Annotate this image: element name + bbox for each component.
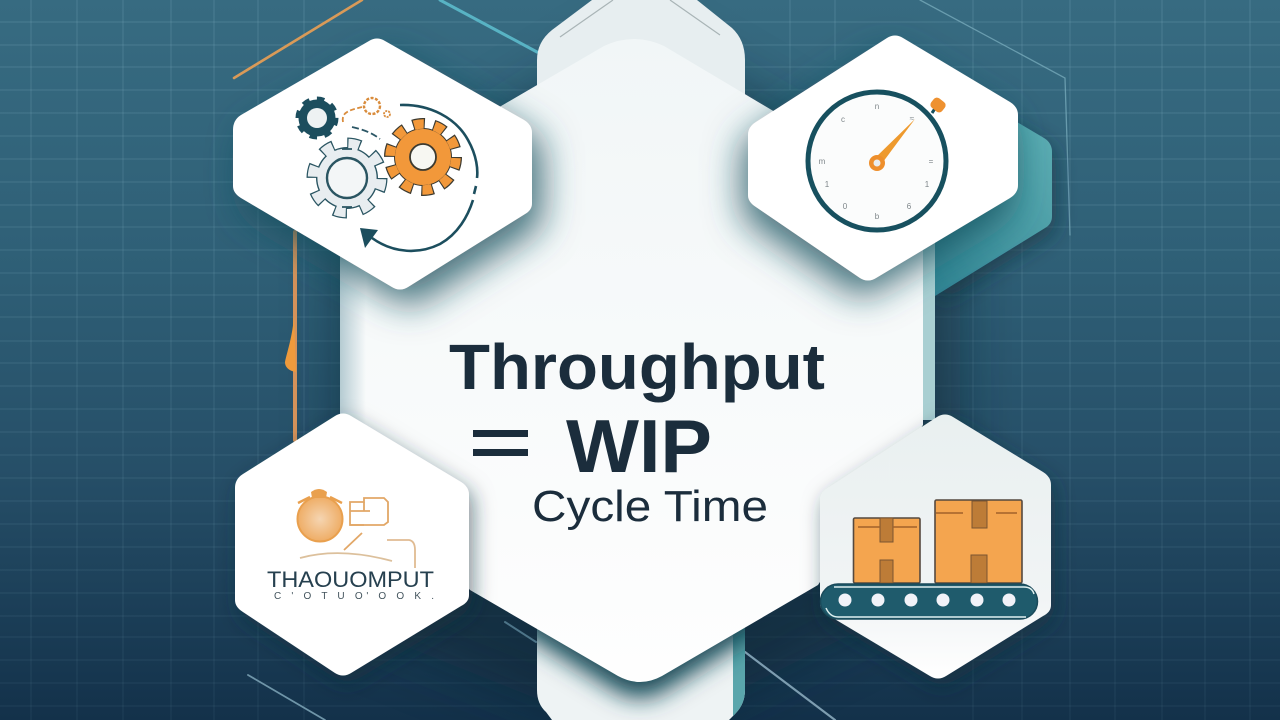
icon: orange stopwatch [298,489,342,542]
icon: large outlined gear [313,144,381,212]
clock dial marks: m [819,157,826,166]
clock dial marks: 1 [925,180,930,189]
clock dial marks: 1 [825,180,830,189]
hexagon: process gears [233,38,532,290]
clock dial marks: 6 [907,202,912,211]
central hexagon panel [340,39,923,682]
clock dial marks: 0 [843,202,848,211]
teal strip at the right edge of the central panel [923,240,935,420]
icon: cycle arrow [360,105,477,251]
label: garbled emblem text: THAOUOMPUT [267,567,434,592]
icon: clock knob [929,96,947,114]
label: garbled emblem subtext: C ' O T U O' O O K . [274,591,434,602]
back column, bottom [537,628,745,720]
icon: small dark gear [299,100,335,136]
equals sign [473,430,528,456]
icon: large box [935,500,1022,583]
hexagon: stopwatch [748,36,1018,280]
soft shadow around the hexagon cluster [340,30,960,720]
heading: WIP: WIP [566,404,712,488]
back column, top [537,0,745,130]
teal hexagon behind the clock [935,112,1052,296]
icon: clock face [808,92,946,230]
label: Cycle Time: Cycle Time [532,482,768,531]
clock dial marks: ≈ [910,114,915,123]
clock dial marks: = [929,157,934,166]
clock dial marks [819,102,934,221]
icon: parcel outline [300,498,415,568]
title formula [449,331,825,531]
icon: small box [854,518,920,583]
clock dial marks: b [875,212,880,221]
clock dial marks: n [875,102,879,111]
hexagon: conveyor boxes [820,414,1051,678]
icon: clock needle [869,119,915,171]
accent lines [234,0,1070,720]
icon: orange gear [390,124,456,190]
clock dial marks: c [841,115,845,124]
icon: conveyor belt [820,584,1038,619]
hexagon: throughput emblem [235,414,469,676]
heading: Throughput: Throughput [449,331,825,403]
icon: dashed orange gear [343,98,390,139]
